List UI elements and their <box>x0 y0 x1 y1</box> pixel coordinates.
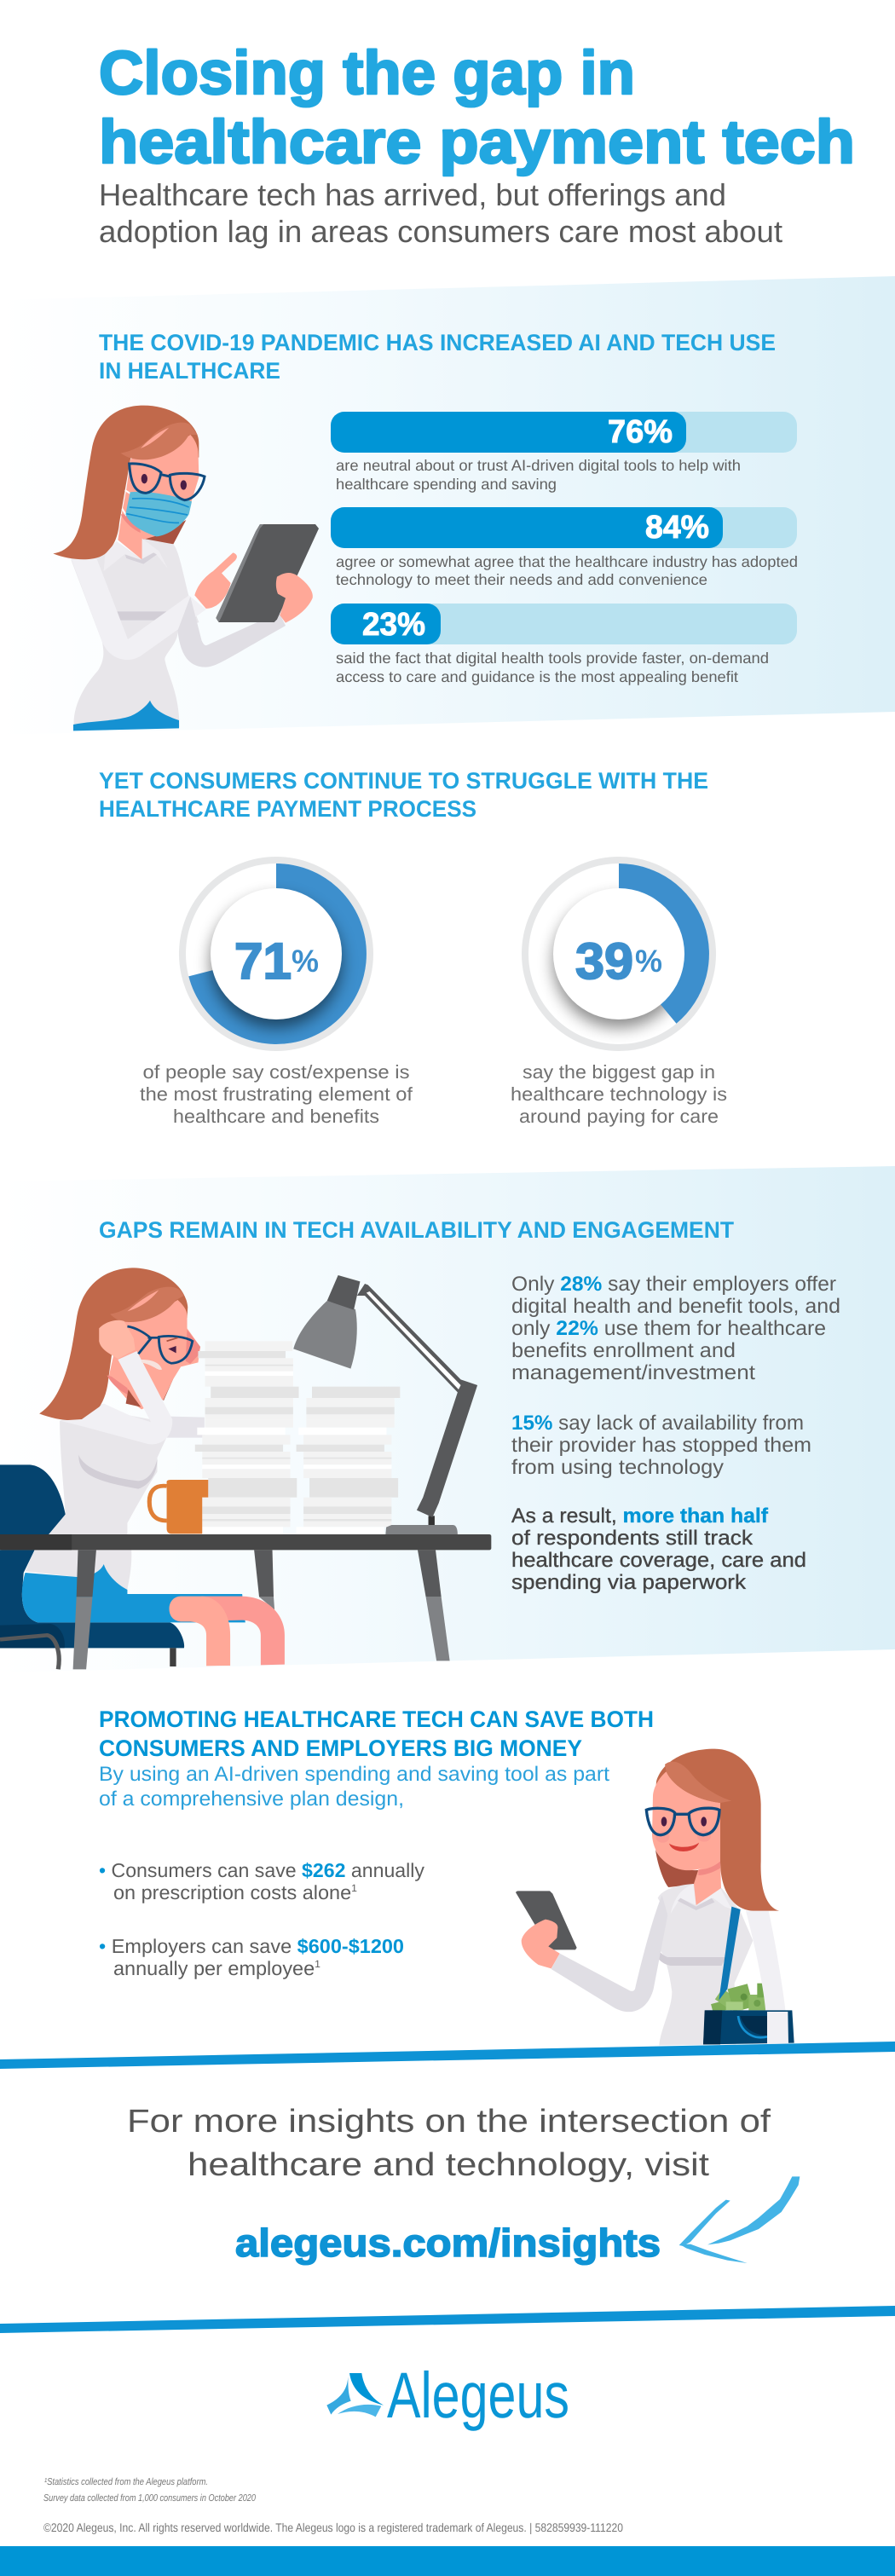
chair <box>0 1464 184 1669</box>
divider band <box>0 2042 895 2069</box>
subtitle <box>99 177 782 249</box>
text: 28 percent and 22 percent <box>511 1273 840 1384</box>
footnotes: ¹Statistics collected from the Alegeus platform. <box>44 2477 208 2487</box>
footer bar <box>0 2546 895 2576</box>
text: 23 percent caption: said the fact that digital health tools provide faster, on-demand <box>336 650 769 667</box>
heading: struggle: HEALTHCARE PAYMENT PROCESS <box>99 796 476 822</box>
mug <box>149 1480 208 1533</box>
woman body <box>22 1268 245 1622</box>
illustration: smiling woman with phone and bag of money <box>516 1749 794 2045</box>
icon: logo mark <box>326 2373 384 2417</box>
text: 84 percent caption: technology to meet their needs and add convenience <box>336 571 707 588</box>
text: consumers bullet <box>99 1859 424 1903</box>
heading: promoting: CONSUMERS AND EMPLOYERS BIG MONEY <box>99 1736 582 1761</box>
text: 23 percent caption <box>336 650 769 685</box>
text: 15 percent: from using technology <box>511 1456 724 1479</box>
subtitle: adoption lag in areas consumers care most about <box>99 214 782 249</box>
text: plan design intro: By using an AI-driven spending and saving tool as part <box>99 1763 609 1786</box>
paper stacks <box>195 1341 400 1534</box>
icon: hand-drawn arrow <box>679 2176 800 2263</box>
text: 39 percent caption <box>511 1061 727 1127</box>
money <box>711 1984 765 2014</box>
text: 15 percent: 15% say lack of availability from <box>511 1412 804 1435</box>
bar chart: 23 percent: 23% <box>362 607 425 643</box>
text: consumers bullet: on prescription costs alone <box>113 1881 347 1903</box>
text: 71 percent caption: healthcare and benefits <box>173 1106 379 1127</box>
donut chart: 39 percent <box>525 860 713 1048</box>
text: 23 percent caption: access to care and guidance is the most appealing benefit <box>336 668 738 685</box>
text: 39 percent caption: around paying for care <box>519 1106 719 1127</box>
title <box>99 39 855 176</box>
heading: struggle: YET CONSUMERS CONTINUE TO STRUGGLE WITH THE <box>99 768 708 794</box>
bar chart: 23 percent <box>331 604 797 644</box>
heading: promoting <box>99 1707 654 1761</box>
text: 76 percent caption: are neutral about or trust AI-driven digital tools to help with <box>336 457 741 474</box>
bar chart: 76 percent <box>331 412 797 453</box>
text: plan design intro: of a comprehensive plan design, <box>99 1788 404 1811</box>
text: 15 percent: their provider has stopped them <box>511 1434 811 1457</box>
text: 15 percent <box>511 1412 811 1479</box>
copyright: ©2020 Alegeus, Inc. All rights reserved worldwide. The Alegeus logo is a registered trademark of Alegeus. | 582859939-111220 <box>43 2521 623 2534</box>
text: 71 percent caption: of people say cost/expense is <box>143 1061 409 1083</box>
text: more than half: As a result, more than half <box>511 1505 769 1528</box>
bag <box>703 2010 794 2044</box>
text: 28 percent and 22 percent: only 22% use them for healthcare <box>511 1317 826 1340</box>
panel: covid tech use background <box>0 276 895 735</box>
donut chart: 71 percent: % <box>292 944 319 979</box>
title: Closing the gap in <box>99 39 635 107</box>
text: 28 percent and 22 percent: digital health and benefit tools, and <box>511 1295 840 1318</box>
subtitle: Healthcare tech has arrived, but offerings and <box>99 177 726 212</box>
desk lamp <box>293 1275 477 1534</box>
text: 28 percent and 22 percent: Only 28% say their employers offer <box>511 1273 836 1296</box>
text: plan design intro <box>99 1763 609 1811</box>
divider band <box>0 2306 895 2333</box>
text: employers bullet: • Employers can save $600-$1200 <box>99 1935 404 1957</box>
link text: alegeus.com/insights <box>235 2221 661 2265</box>
illustration: woman with mask and tablet <box>53 406 319 731</box>
text: more than half <box>511 1505 806 1594</box>
donut chart: 39 percent: % <box>635 944 662 979</box>
text: 39 percent caption: healthcare technology is <box>511 1083 727 1105</box>
donut chart: 71 percent <box>182 860 370 1048</box>
footnotes <box>43 2477 256 2504</box>
heading: struggle <box>99 768 708 822</box>
text: 28 percent and 22 percent: management/investment <box>511 1361 755 1384</box>
text: call to action: For more insights on the intersection of <box>127 2104 771 2140</box>
bar chart: 84 percent <box>331 507 797 548</box>
heading: promoting: PROMOTING HEALTHCARE TECH CAN SAVE BOTH <box>99 1707 654 1732</box>
footnotes: Survey data collected from 1,000 consumers in October 2020 <box>43 2493 256 2504</box>
text: employers bullet <box>99 1935 404 1979</box>
text: 71 percent caption <box>140 1061 413 1127</box>
text: 76 percent caption: healthcare spending and saving <box>336 476 557 493</box>
donut chart: 71 percent: 71 <box>234 933 292 990</box>
donut chart: 39 percent: 39 <box>575 933 633 990</box>
text: more than half: spending via paperwork <box>511 1571 747 1594</box>
text: 39 percent caption: say the biggest gap in <box>523 1061 715 1083</box>
heading: gaps: GAPS REMAIN IN TECH AVAILABILITY AND ENGAGEMENT <box>99 1217 734 1243</box>
bar chart: 84 percent: 84% <box>645 510 709 546</box>
text: more than half: of respondents still track <box>511 1527 754 1550</box>
heading: covid: IN HEALTHCARE <box>99 358 280 384</box>
logo: Alegeus: Alegeus <box>387 2359 569 2432</box>
text: 76 percent caption <box>336 457 741 493</box>
text: 84 percent caption <box>336 553 798 588</box>
bar chart: 76 percent: 76% <box>608 414 673 450</box>
text: call to action <box>127 2104 771 2183</box>
text: employers bullet: annually per employee <box>113 1957 310 1979</box>
heading: covid <box>99 330 776 384</box>
text: 71 percent caption: the most frustrating element of <box>140 1083 413 1105</box>
text: 84 percent caption: agree or somewhat agree that the healthcare industry has adopted <box>336 553 798 570</box>
text: consumers bullet: • Consumers can save $262 annually <box>99 1859 424 1881</box>
desk <box>0 1534 491 1669</box>
text: call to action: healthcare and technology, visit <box>188 2147 710 2183</box>
text: more than half: healthcare coverage, care and <box>511 1549 806 1572</box>
text: 28 percent and 22 percent: benefits enrollment and <box>511 1339 736 1362</box>
text: consumers bullet: 1 <box>351 1882 357 1894</box>
text: employers bullet: 1 <box>315 1958 320 1970</box>
logo: Alegeus <box>326 2359 569 2432</box>
title: healthcare payment tech <box>99 108 855 176</box>
heading: covid: THE COVID-19 PANDEMIC HAS INCREASED AI AND TECH USE <box>99 330 776 355</box>
illustration: stressed woman at desk with papers and lamp <box>0 1268 491 1669</box>
panel: gaps background <box>0 1166 895 1672</box>
